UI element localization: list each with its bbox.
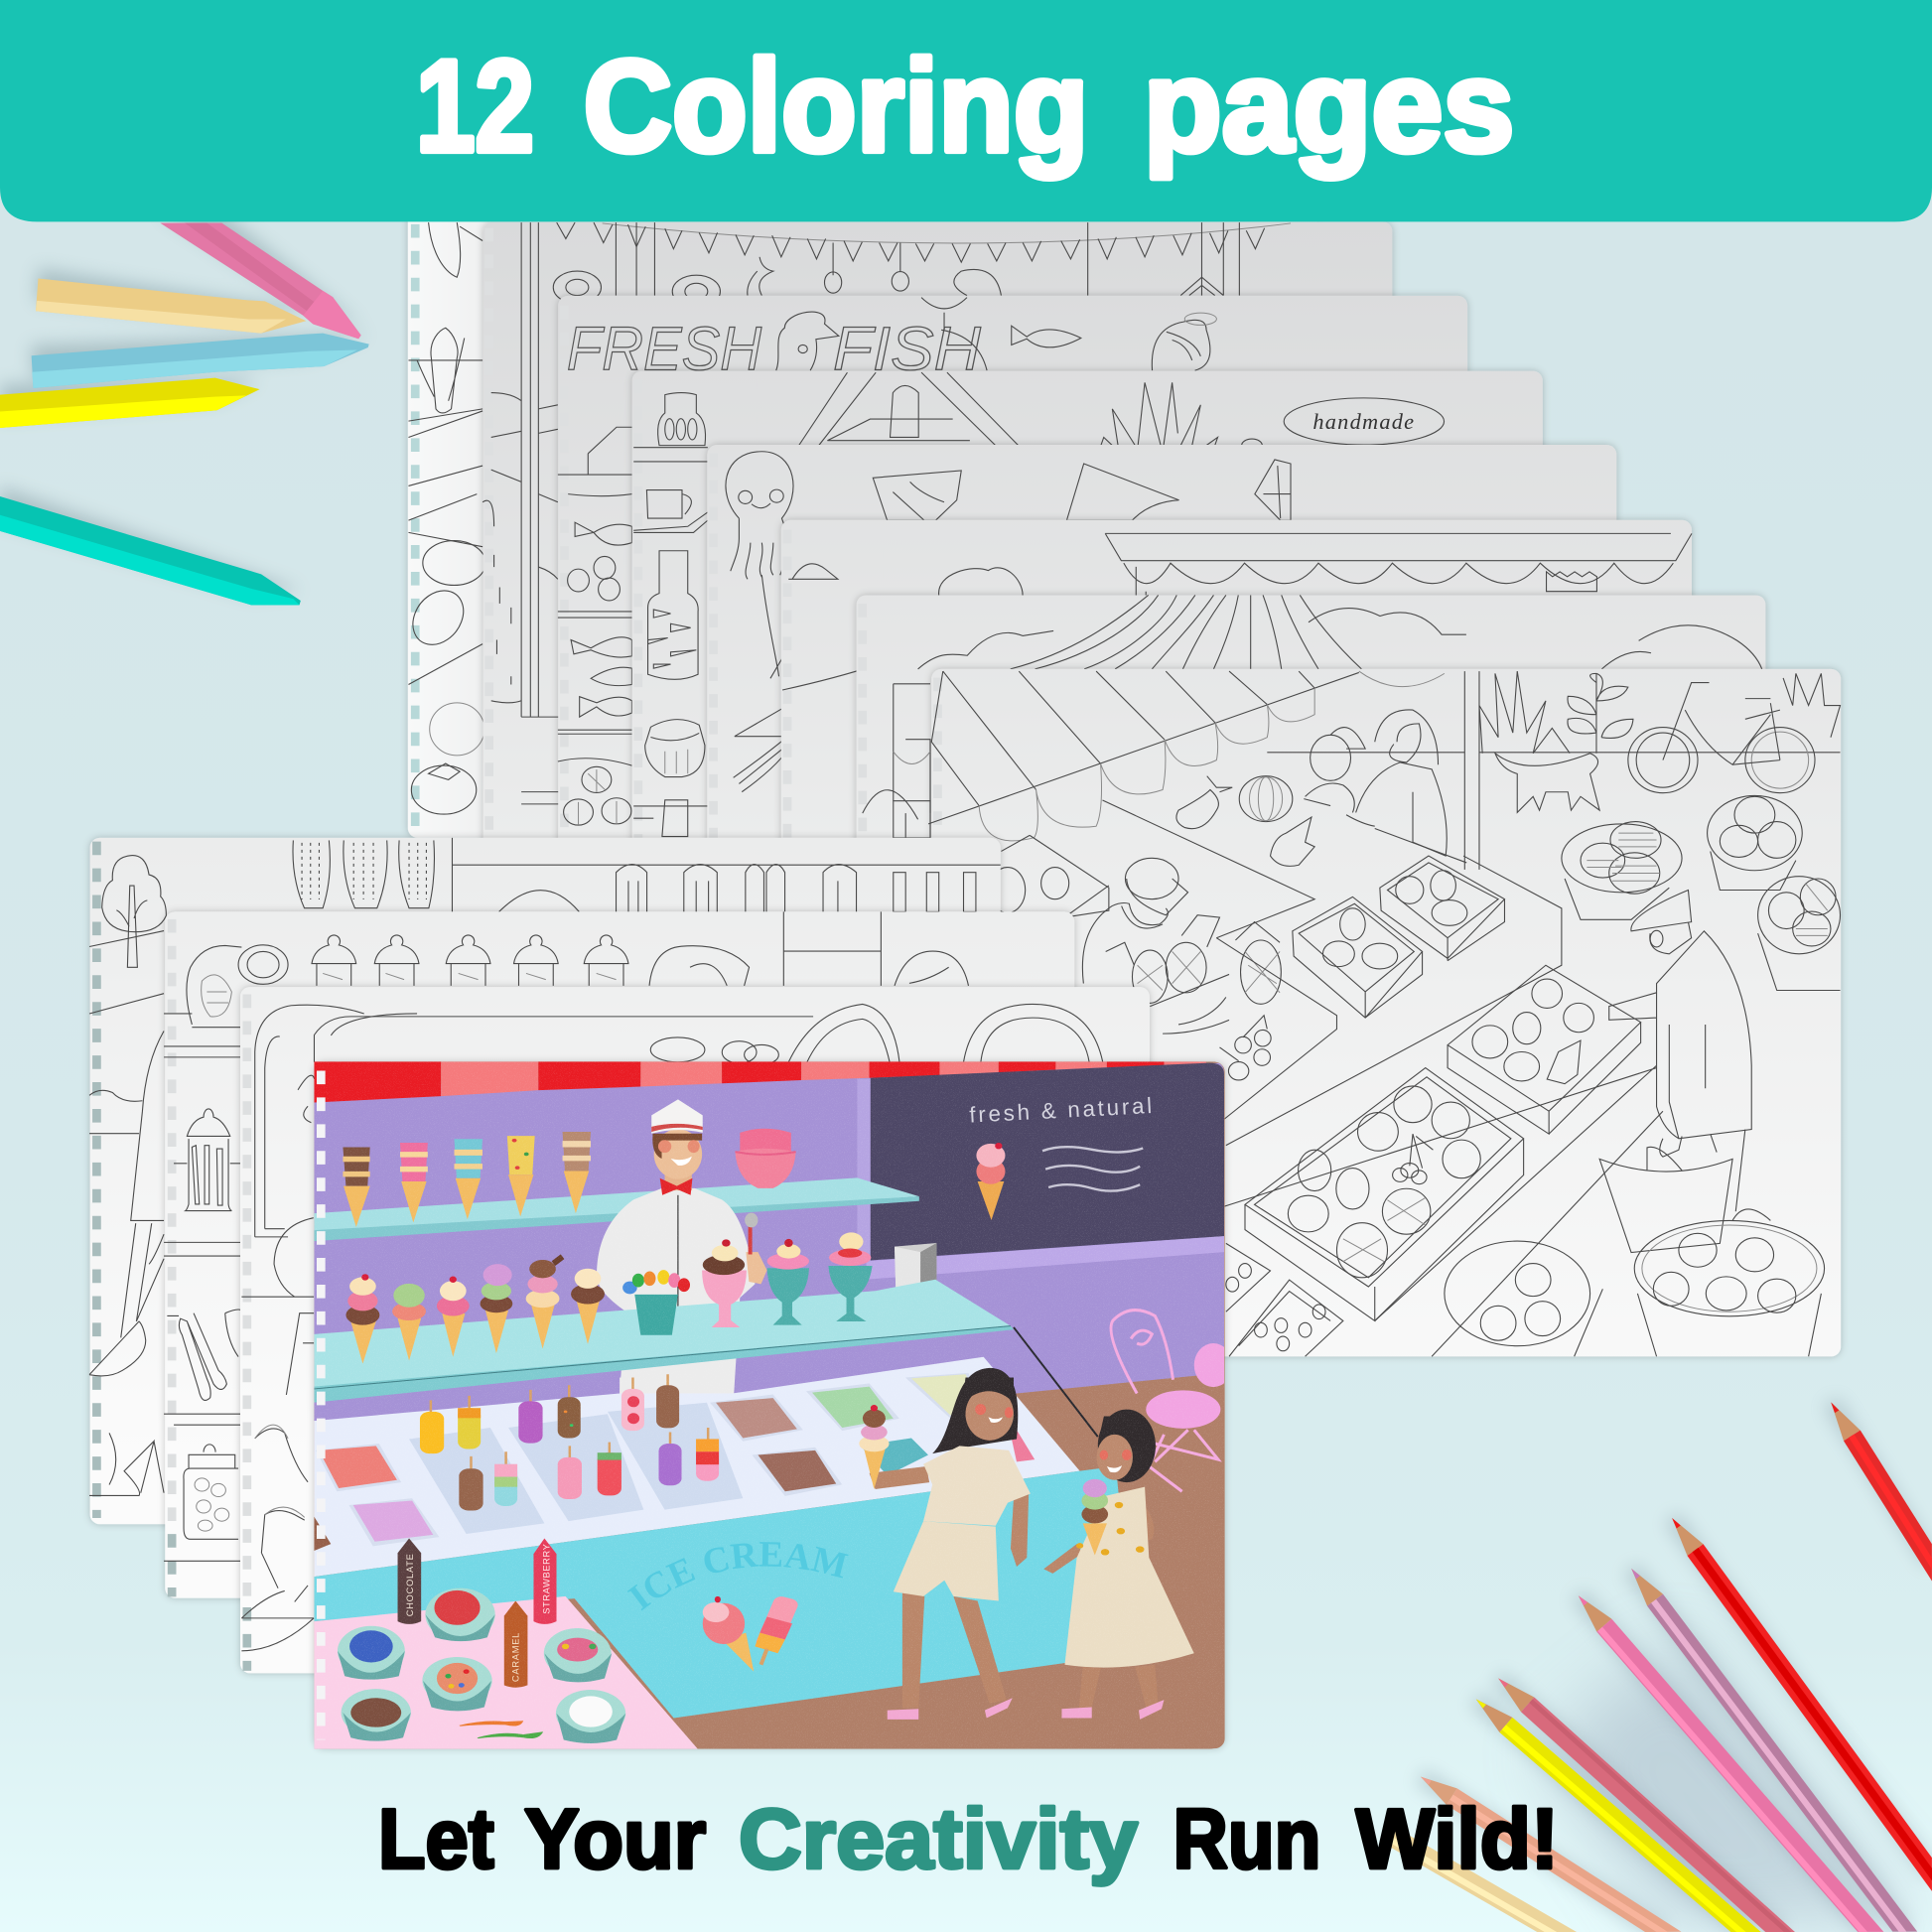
pencil: mauve — [1623, 1563, 1917, 1932]
post and back wall — [1267, 671, 1841, 870]
chair and table — [1111, 1311, 1233, 1491]
pineapples — [1106, 915, 1281, 1004]
woman — [859, 1368, 1031, 1720]
crayons — [0, 211, 369, 605]
toppings counter — [314, 1596, 698, 1749]
black support line — [1014, 1327, 1098, 1437]
awning — [928, 671, 1445, 841]
paper grain — [314, 1061, 1224, 1749]
crayon: yellow — [0, 378, 260, 428]
pencil: red — [1664, 1512, 1932, 1891]
sundaes — [702, 1232, 873, 1327]
tagline: Run — [1173, 1791, 1320, 1886]
lantern jar — [174, 1109, 241, 1211]
tagline: Your — [524, 1791, 706, 1886]
sauce bottles — [398, 1539, 557, 1688]
crate: peaches — [1448, 965, 1641, 1134]
stack of coloring pages: top — [405, 148, 1841, 1356]
tagline: Wild! — [1356, 1791, 1559, 1886]
binding holes — [318, 1070, 325, 1739]
sheet: vegetables — [405, 148, 1317, 838]
girl — [1043, 1410, 1194, 1720]
bowls — [1562, 795, 1841, 991]
bottle label: chocolate: CHOCOLATE — [405, 1553, 415, 1616]
counter front — [314, 1466, 1134, 1718]
chalk text: fresh & natural — [969, 1093, 1155, 1128]
ice cream tubs — [314, 1373, 1035, 1551]
pencil: rose — [1491, 1671, 1795, 1932]
shopping basket — [1599, 1147, 1732, 1253]
crayon: light blue — [32, 334, 369, 388]
pencil: pink — [1571, 1589, 1883, 1932]
title — [416, 33, 1514, 179]
napkin dispenser — [895, 1243, 937, 1287]
apple bowl — [1445, 1241, 1590, 1346]
lower crates — [1226, 1243, 1343, 1356]
sheet: circus tent — [857, 595, 1765, 1283]
header banner — [0, 0, 1932, 221]
pillar — [857, 1079, 871, 1261]
pencil: red far right — [1823, 1397, 1932, 1581]
pencil: salmon — [1416, 1768, 1682, 1932]
tongs — [179, 1310, 241, 1400]
fruit trays — [1150, 938, 1336, 1120]
crate: mixed fruit — [1245, 1068, 1524, 1320]
scooper man — [597, 1099, 767, 1394]
upper shelf — [314, 1177, 919, 1241]
topping bowls — [338, 1588, 625, 1743]
lavender wall — [314, 1063, 1224, 1452]
awning stripes — [314, 1061, 1206, 1103]
crate: pears — [1380, 856, 1504, 961]
candy jar — [184, 1445, 238, 1539]
sheet: arched windows — [240, 987, 1150, 1673]
label: handmade oval: handmade — [1312, 409, 1415, 434]
plants — [1479, 671, 1841, 812]
display case — [314, 1357, 1080, 1577]
crate: lemons — [1293, 897, 1423, 1018]
sheet: park and belts — [89, 838, 1001, 1524]
main counter — [990, 800, 1663, 1356]
colored page: ice cream shop — [310, 1058, 1229, 1752]
title: pages — [1144, 33, 1514, 179]
coloured pencils — [1381, 1397, 1932, 1932]
apple bucket — [1634, 1209, 1825, 1356]
sheet: market stall with bunting — [483, 221, 1392, 909]
heading: fresh fish sign: FRESH — [567, 315, 761, 383]
lilac ledge — [867, 1236, 1224, 1280]
sheet: fresh fish — [558, 296, 1467, 983]
upper cones — [343, 1132, 591, 1227]
board ice cream and lines — [976, 1143, 1143, 1220]
popsicles — [420, 1374, 719, 1511]
front cone and popsicle — [703, 1594, 800, 1672]
lower counter — [314, 1280, 1014, 1403]
vendor with cap — [1082, 858, 1188, 984]
pink bowls — [735, 1129, 796, 1188]
cactus row and belts — [293, 838, 1001, 911]
lower cones — [345, 1257, 605, 1364]
sheet: octopus and kites — [707, 445, 1616, 1133]
shoppers — [1304, 710, 1447, 856]
pencil: yellow — [1469, 1692, 1761, 1932]
label: handmade oval — [1284, 398, 1445, 445]
blackboard — [871, 1063, 1224, 1260]
sheet: fruit stall — [928, 669, 1841, 1356]
title: Coloring — [584, 33, 1088, 179]
crayon: pink — [160, 223, 361, 339]
stack of coloring pages: bottom left — [89, 838, 1150, 1673]
popsicle trays — [409, 1403, 743, 1534]
tagline: Creativity — [739, 1791, 1139, 1886]
title: 12 — [416, 33, 534, 179]
tagline — [378, 1791, 1559, 1886]
fruits behind — [1176, 776, 1314, 866]
crayon: teal — [0, 496, 301, 605]
sheet: clouds and awning — [781, 520, 1692, 1207]
bottle label: caramel: CARAMEL — [510, 1632, 520, 1682]
crayon: pale yellow — [36, 278, 306, 334]
heading: fresh fish sign: FISH — [833, 315, 981, 383]
bottle label: strawberry: STRAWBERRY — [542, 1544, 552, 1614]
candy drum — [164, 945, 288, 1028]
sheet: handmade — [632, 371, 1543, 1058]
pencil: pale yellow — [1381, 1825, 1577, 1932]
stencil text: ice cream: ICE CREAM — [627, 1542, 848, 1610]
sheet: candy jars — [164, 911, 1074, 1598]
jars row and head — [312, 911, 968, 986]
heading: fresh fish sign — [567, 315, 981, 383]
bicycle — [1628, 683, 1815, 793]
tagline: Let — [378, 1791, 494, 1886]
old man shopper — [1609, 890, 1751, 1211]
page base — [314, 1061, 1224, 1749]
spoons cup — [622, 1270, 690, 1335]
